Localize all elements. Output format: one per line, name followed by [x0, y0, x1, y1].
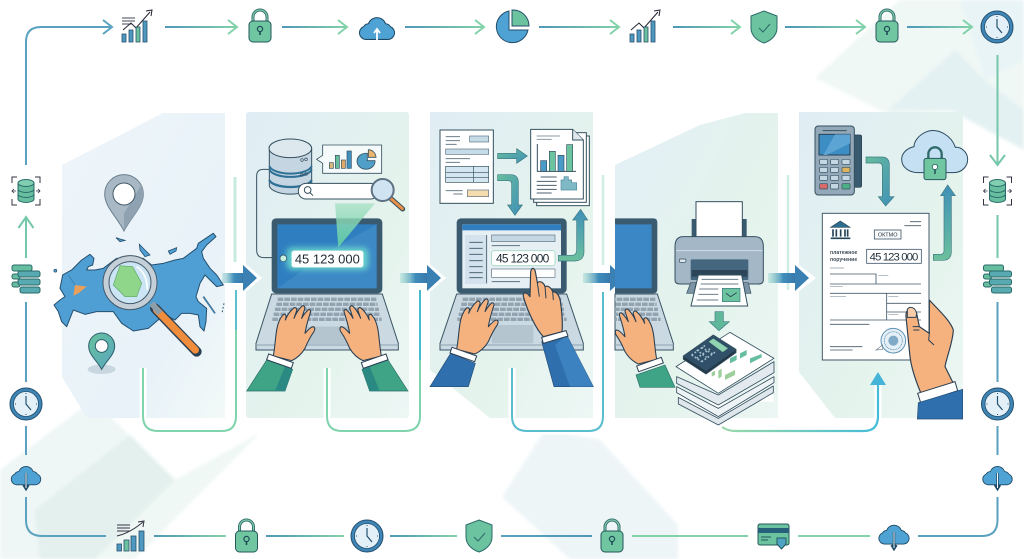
icon: payment card	[758, 524, 789, 549]
connector: panel 3 to 4	[512, 175, 788, 431]
partial laptop	[614, 218, 674, 350]
icon: lock 2	[876, 10, 898, 42]
icon: lock bottom 2	[601, 520, 623, 552]
icon: database cylinder	[269, 139, 312, 194]
arrow: lock to clock	[907, 20, 972, 34]
icon: clock bottom	[351, 520, 383, 552]
icon: cloud download	[879, 525, 909, 549]
source form document	[440, 130, 493, 203]
label: payment order: платежное	[830, 250, 858, 256]
document: payment order: поручение	[830, 257, 857, 263]
printer	[675, 202, 763, 306]
arrow: shield to lock	[785, 20, 865, 34]
icon: shield	[751, 11, 777, 43]
hand and sleeve	[615, 309, 675, 387]
main arrow 1	[222, 258, 262, 298]
holding hand and sleeve	[906, 300, 963, 419]
hands on keyboard	[247, 306, 408, 391]
arrow: terminal to document	[866, 157, 894, 206]
panel: payment order	[799, 112, 963, 418]
connector: stack to payment order	[722, 372, 886, 431]
icon: clock left	[10, 388, 42, 420]
code lookup scene	[247, 139, 408, 391]
icon: lock	[249, 10, 271, 42]
printing scene	[614, 201, 774, 426]
icon: cloud upload	[359, 18, 395, 43]
laptop with form	[440, 218, 583, 350]
main arrow 4	[768, 258, 816, 298]
code value box	[280, 247, 368, 270]
arrow: document to cloud	[933, 185, 955, 260]
panel: code lookup	[246, 112, 409, 418]
icon: secure cloud	[902, 131, 968, 180]
code value box: 45 123 000	[496, 251, 550, 265]
label: OKTMO	[874, 230, 901, 239]
document: payment order	[822, 213, 929, 360]
icon: database left	[12, 177, 40, 205]
icon: magnifier over map	[103, 256, 197, 352]
report stack	[531, 129, 589, 206]
label: OKTMO: ОКТМО	[878, 232, 897, 238]
icon: servers left	[12, 265, 40, 293]
icon: list chart	[117, 521, 144, 551]
left flow column	[10, 177, 106, 536]
paper stack with calculator	[676, 332, 774, 425]
right flow column	[918, 55, 1014, 536]
icon: clock	[981, 11, 1013, 43]
hands and sleeves	[430, 268, 593, 387]
payment scene	[815, 126, 968, 419]
icon: growth chart 2	[630, 10, 660, 42]
panel: printing	[615, 113, 778, 418]
callout: charts bubble	[317, 145, 382, 173]
icon: cloud right	[983, 466, 1012, 489]
seal	[876, 328, 906, 353]
calculator	[683, 335, 736, 374]
bottom flow line with icons	[117, 520, 909, 552]
icon: bank	[831, 221, 850, 238]
payment terminal	[815, 126, 862, 195]
beam from search	[335, 203, 375, 247]
arrow: form to report	[498, 149, 527, 163]
icon: clock right	[982, 388, 1014, 420]
top flow line with icons	[26, 10, 1013, 165]
icon: cloud left	[11, 466, 41, 489]
panel: form entry	[430, 112, 593, 418]
arrow: chart to lock	[165, 20, 237, 34]
form fields	[830, 268, 921, 350]
arrow: laptop to report	[558, 209, 588, 261]
icon: pie chart	[496, 10, 529, 43]
arrow: lock to cloud	[282, 20, 347, 34]
arrow: pie to chart	[539, 20, 619, 34]
map scene	[54, 139, 408, 391]
laptop with code	[256, 218, 398, 350]
icon: database	[984, 177, 1012, 205]
database link line	[257, 169, 280, 258]
map of Russia	[54, 233, 224, 331]
arrow: up to database	[18, 217, 34, 258]
arrow: chart to shield	[673, 20, 740, 34]
code value box: 45 123 000	[870, 252, 918, 264]
icon: growth chart	[122, 10, 152, 42]
main arrow 3	[583, 258, 631, 298]
panel: region map	[62, 113, 225, 418]
arrow: form to laptop	[498, 175, 522, 215]
search bar	[298, 179, 403, 209]
icon: shield bottom	[466, 520, 492, 552]
icon: lock bottom	[236, 520, 258, 552]
icon: servers	[984, 265, 1012, 293]
code value box: 45 123 000	[295, 251, 360, 266]
connector: panel 1 to 2	[143, 177, 236, 431]
icon: grey location pin	[105, 175, 143, 231]
form entry scene	[430, 129, 774, 425]
connector: top left corner	[26, 20, 112, 165]
arrow: cloud to pie	[405, 20, 484, 34]
arrow: printer to papers	[709, 312, 729, 331]
icon: green location pin	[88, 333, 116, 374]
arrow: clock down to database	[990, 55, 1005, 165]
main arrow 2	[400, 258, 446, 298]
connector: panel 2 to 3	[327, 290, 420, 431]
